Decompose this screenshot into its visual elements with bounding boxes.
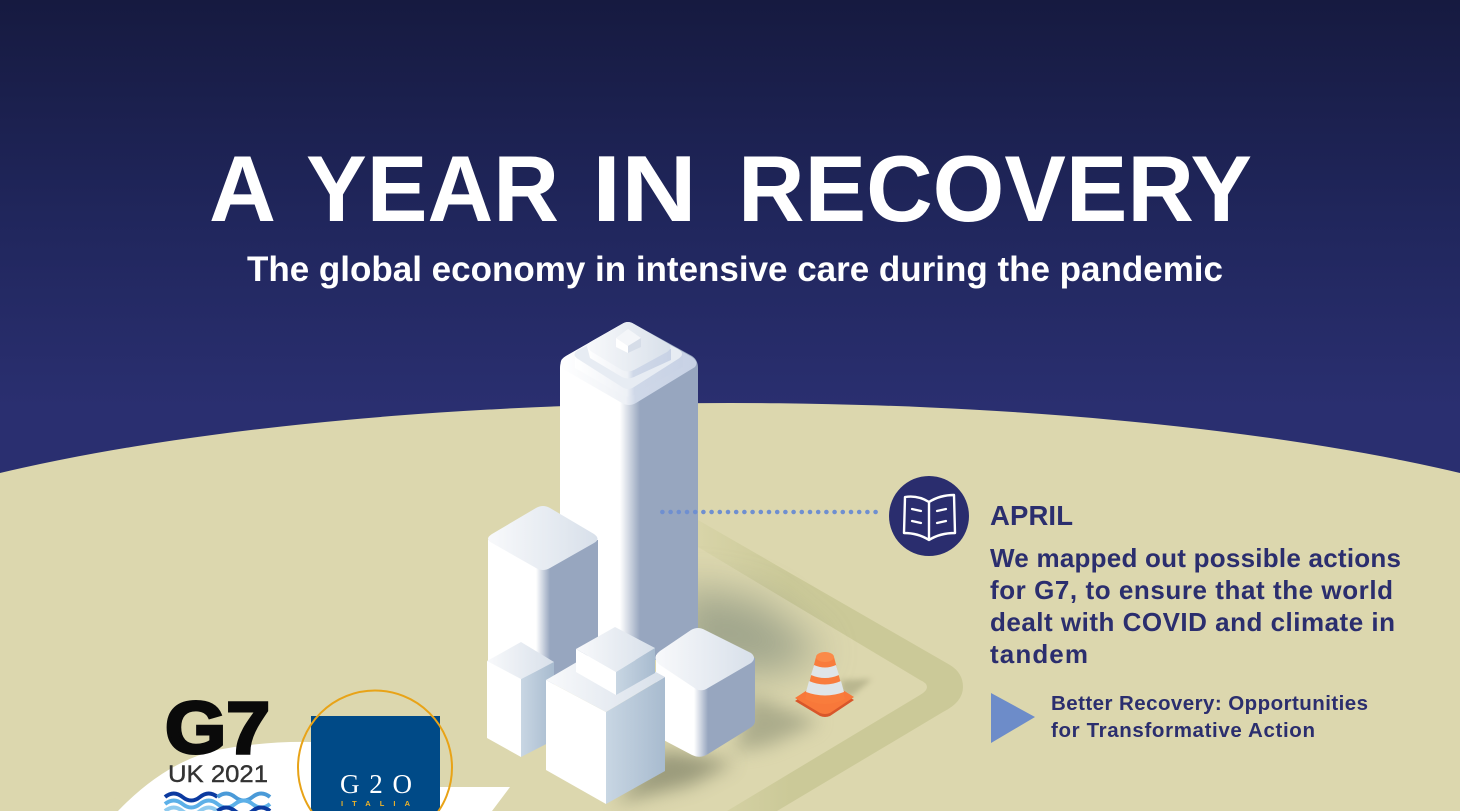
logo: G7 UK 2021: UK 2021 [168,761,268,788]
logo: G7 UK 2021: G7 [165,688,270,769]
title [209,136,1252,241]
logo: G20 Italia: G2O [340,769,412,799]
heading: April: APRIL [990,500,1073,531]
illustration: large front building [546,627,665,804]
title: A [209,136,276,241]
building shadows [615,585,825,803]
ground: curved beige surface [0,403,1460,811]
dotted connector line [662,510,878,514]
text block: report link: for Transformative Action [1051,719,1315,742]
icon: link arrow [991,693,1035,743]
tower top block [616,329,641,353]
text block: April description: dealt with COVID and climate in [990,607,1395,637]
illustration: white tower [560,322,698,660]
logo: G7 UK 2021 [165,688,270,811]
background: night sky [0,0,1460,480]
illustration: right front building [656,628,755,757]
text block: April description: We mapped out possible actions [990,543,1401,573]
subtitle: The global economy in intensive care during the pandemic [247,250,1223,289]
title: YEAR [306,136,559,241]
logo: G20 Italia [298,690,452,811]
text block: report link [1051,692,1368,742]
illustration: small left building [487,642,554,757]
road [698,520,963,811]
icon: traffic cone [795,652,872,717]
title: RECOVERY [738,136,1252,241]
text block: April description: tandem [990,639,1088,669]
logo: G20 Italia: ITALIA [341,799,411,808]
white hill behind logos [118,742,510,811]
text block: April description: for G7, to ensure that the world [990,575,1393,605]
icon: open book in circle [889,476,969,556]
text block: report link: Better Recovery: Opportunities [1051,692,1368,715]
illustration: left middle building [488,506,598,680]
text block: April description [990,543,1401,669]
title: IN [592,136,697,241]
